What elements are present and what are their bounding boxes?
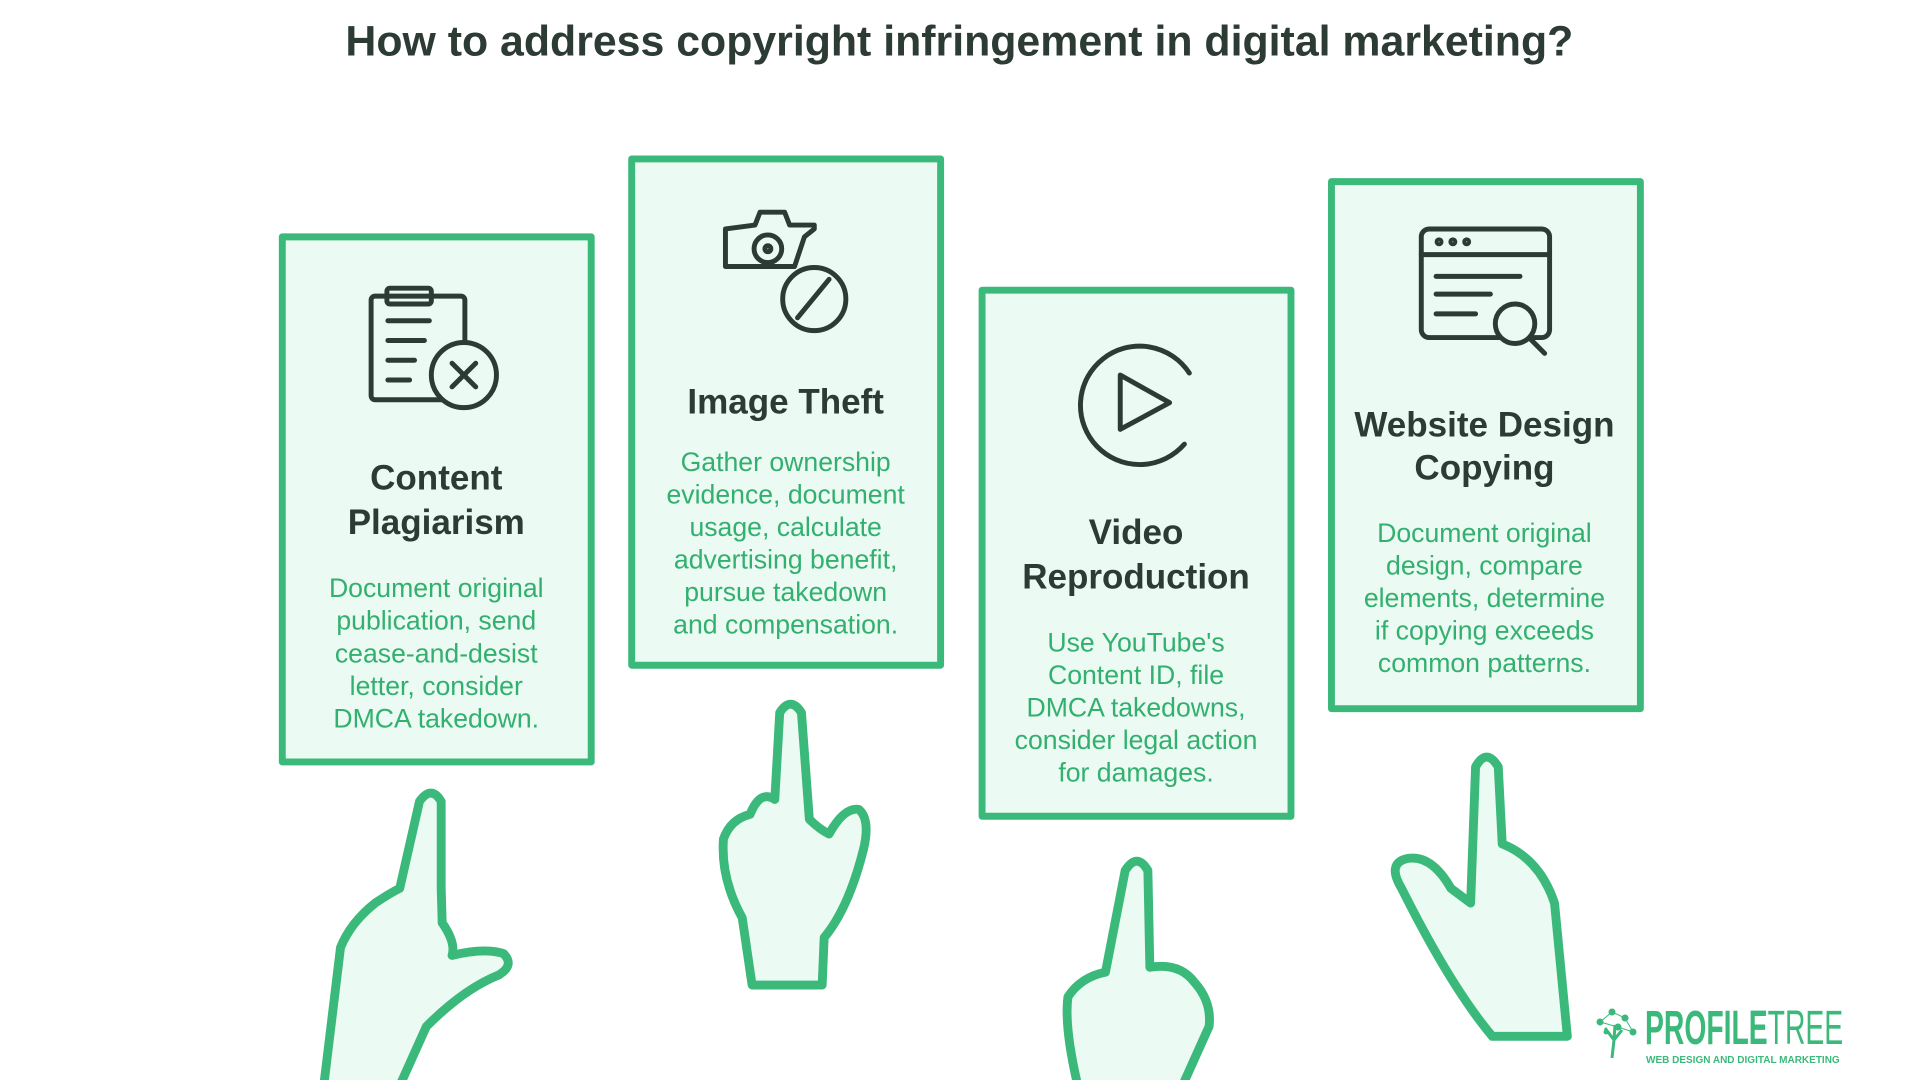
panel: content plagiarism: Plagiarism xyxy=(348,503,525,542)
body text xyxy=(1015,627,1257,788)
body text: Content ID, file xyxy=(1048,660,1224,690)
hand 2 xyxy=(723,704,866,985)
panel: content plagiarism xyxy=(282,237,591,762)
panel: video reproduction: Reproduction xyxy=(1022,557,1250,596)
body text xyxy=(329,573,544,733)
logo: ProfileTree: PROFILETREE xyxy=(1645,1001,1843,1055)
body text: pursue takedown xyxy=(684,577,887,607)
body text: for damages. xyxy=(1058,758,1214,788)
icon: browser with magnifier xyxy=(1421,229,1550,353)
body text: publication, send xyxy=(336,606,536,636)
body text: cease-and-desist xyxy=(335,638,538,668)
icon: play circle xyxy=(1080,346,1189,465)
panel: website design copying xyxy=(1331,182,1640,709)
body text: Gather ownership xyxy=(681,447,891,477)
body text: Document original xyxy=(329,573,544,603)
body text: letter, consider xyxy=(350,671,523,701)
hand 1 xyxy=(324,793,508,1080)
hand 3 xyxy=(1067,861,1209,1080)
body text: usage, calculate xyxy=(689,512,882,542)
title: How to address copyright infringement in digital marketing? xyxy=(345,17,1573,65)
body text: DMCA takedown. xyxy=(333,703,539,733)
heading: Content xyxy=(370,459,503,498)
body text: design, compare xyxy=(1386,550,1583,580)
heading: Website Design xyxy=(1354,405,1614,444)
body text: consider legal action xyxy=(1015,725,1257,755)
body text: Use YouTube's xyxy=(1047,627,1225,657)
icon: clipboard with x xyxy=(371,288,496,408)
body text: advertising benefit, xyxy=(674,545,897,575)
logo: ProfileTree: WEB DESIGN AND DIGITAL MARKETING xyxy=(1646,1055,1840,1066)
body text: common patterns. xyxy=(1378,648,1591,678)
panel: image theft xyxy=(632,159,941,665)
body text xyxy=(666,447,905,640)
body text: evidence, document xyxy=(666,479,905,509)
body text: DMCA takedowns, xyxy=(1027,693,1246,723)
panel: website design copying: Copying xyxy=(1414,449,1554,488)
body text xyxy=(1364,518,1605,678)
heading: Image Theft xyxy=(687,383,884,422)
body text: elements, determine xyxy=(1364,583,1605,613)
body text: if copying exceeds xyxy=(1375,616,1594,646)
hand 4 xyxy=(1395,757,1567,1036)
logo: ProfileTree xyxy=(1597,1001,1843,1066)
heading: Video xyxy=(1089,513,1183,552)
icon: camera with ban sign xyxy=(725,212,846,331)
icon: tree xyxy=(1597,1009,1636,1058)
body text: and compensation. xyxy=(673,610,898,640)
panel: video reproduction xyxy=(982,290,1291,816)
body text: Document original xyxy=(1377,518,1592,548)
